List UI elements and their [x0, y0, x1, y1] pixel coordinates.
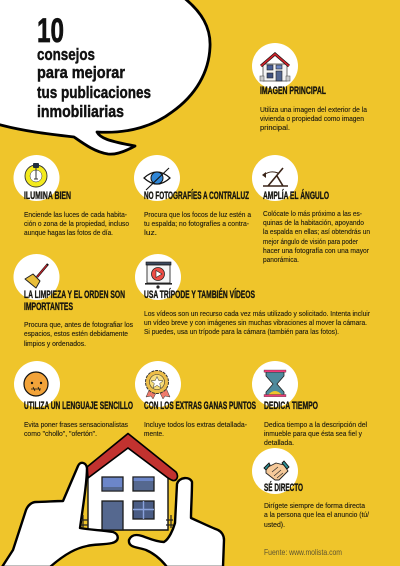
window top left — [102, 477, 123, 491]
text block: Enciende las luces de cada habita- — [24, 210, 127, 219]
window top right — [133, 477, 154, 491]
text block: tu espalda; no fotografíes a contra- — [144, 219, 249, 228]
text block: ción o zona de la propiedad, incluso — [24, 219, 129, 228]
speech bubble — [0, 0, 210, 154]
text block: Si puedes, usa un trípode para la cámara (también para las fotos). — [144, 327, 339, 336]
text block — [144, 420, 247, 438]
heading: CON LOS EXTRAS GANAS PUNTOS — [144, 400, 256, 412]
panel: utiliza un lenguaje sencillo — [14, 361, 133, 438]
heading: AMPLÍA EL ÁNGULO — [263, 189, 329, 202]
text block: inmueble para que ésta sea fiel y — [264, 429, 362, 438]
icon: broom — [14, 254, 60, 300]
title: para mejorar — [37, 63, 125, 82]
text block: Los vídeos son un recurso cada vez más utilizado y solicitado. Intenta incluir — [144, 309, 370, 318]
panel: usa trípode y también vídeos — [135, 254, 370, 336]
text block: Dedica tiempo a la descripción del — [264, 420, 367, 429]
text block: Dirígete siempre de forma directa — [264, 501, 366, 510]
text block: la espalda en ellas; así obtendrás un — [263, 227, 370, 236]
icon: medal — [135, 361, 181, 407]
text block — [24, 320, 133, 348]
text block — [144, 210, 252, 237]
heading: LA LIMPIEZA Y EL ORDEN SON — [24, 289, 125, 301]
heading: IMAGEN PRINCIPAL — [260, 85, 326, 97]
heading: USA TRÍPODE Y TAMBIÉN VÍDEOS — [144, 288, 255, 301]
heading — [24, 289, 125, 313]
text block: un vídeo breve y con imágenes sin muchas vibraciones al mover la cámara. — [144, 318, 367, 327]
panel: sé directo — [252, 448, 370, 529]
heading: DEDICA TIEMPO — [264, 400, 318, 412]
text block: Utiliza una imagen del exterior de la — [260, 105, 368, 114]
heading: ILUMINA BIEN — [24, 190, 71, 202]
text block — [144, 309, 370, 336]
text block — [260, 105, 368, 132]
text block: panorámica. — [263, 255, 299, 264]
text block: espacios, estos estén debidamente — [24, 329, 128, 338]
text block: a la persona que lea el anuncio (tú/ — [264, 510, 370, 519]
panel: amplía el ángulo — [252, 155, 370, 264]
text block: mejor ángulo de visión para poder — [263, 237, 358, 246]
icon: face — [14, 361, 60, 407]
icon: light bulb — [14, 155, 60, 201]
text block: luz. — [144, 228, 157, 237]
panel: ilumina bien — [14, 155, 129, 237]
illustration: hands framing a house — [2, 434, 224, 566]
text block — [24, 420, 128, 438]
panel: no fotografíes a contraluz — [134, 155, 252, 237]
text block: quinas de la habitación, apoyando — [263, 218, 364, 227]
icon: hourglass — [252, 361, 298, 407]
house body — [88, 446, 168, 530]
icon: crossed eye — [134, 155, 180, 201]
title: tus publicaciones — [37, 83, 151, 102]
text block: limpios y ordenados. — [24, 339, 86, 348]
icon: video screen — [135, 254, 181, 300]
text block — [264, 420, 367, 447]
title: 10 — [37, 12, 64, 50]
roof — [87, 434, 177, 481]
text block: Incluye todos los extras detallada- — [144, 420, 247, 429]
text block — [24, 210, 129, 237]
title — [37, 12, 151, 121]
text block: mente. — [144, 429, 164, 438]
text block: hacer una fotografía con una mayor — [263, 246, 369, 255]
panel: dedica tiempo — [252, 361, 367, 447]
text block — [264, 501, 370, 529]
right hand — [129, 478, 224, 566]
title: inmobiliarias — [37, 102, 124, 121]
heading: IMPORTANTES — [24, 301, 73, 313]
icon: handshake — [252, 448, 298, 494]
right railing — [166, 515, 173, 528]
heading: UTILIZA UN LENGUAJE SENCILLO — [24, 400, 133, 412]
text block: Evita poner frases sensacionalistas — [24, 420, 128, 429]
text block: detallada. — [264, 438, 294, 447]
heading: SÉ DIRECTO — [264, 481, 303, 494]
heading: NO FOTOGRAFÍES A CONTRALUZ — [144, 189, 249, 202]
panel: con los extras ganas puntos — [135, 361, 256, 438]
text block: como "chollo", "ofertón". — [24, 429, 97, 438]
text block — [263, 209, 370, 264]
icon: angle — [252, 155, 298, 201]
text block: principal. — [260, 123, 290, 132]
title: consejos — [37, 45, 95, 64]
text block: Procura que, antes de fotografiar los — [24, 320, 133, 329]
left hand — [2, 463, 118, 566]
icon: house — [252, 43, 298, 89]
panel: la limpieza y el orden — [14, 254, 133, 348]
panel: imagen principal — [252, 43, 368, 132]
text block: Procura que los focos de luz estén a — [144, 210, 252, 219]
text block: vivienda o propiedad como imagen — [260, 114, 364, 123]
text block: Colócate lo más próximo a las es- — [263, 209, 362, 218]
source credit: Fuente: www.molista.com — [264, 548, 342, 557]
text block: aunque hagas las fotos de día. — [24, 228, 113, 237]
text block: usted). — [264, 520, 285, 529]
window bottom right — [133, 501, 154, 519]
door — [102, 501, 123, 530]
left railing — [81, 515, 88, 528]
